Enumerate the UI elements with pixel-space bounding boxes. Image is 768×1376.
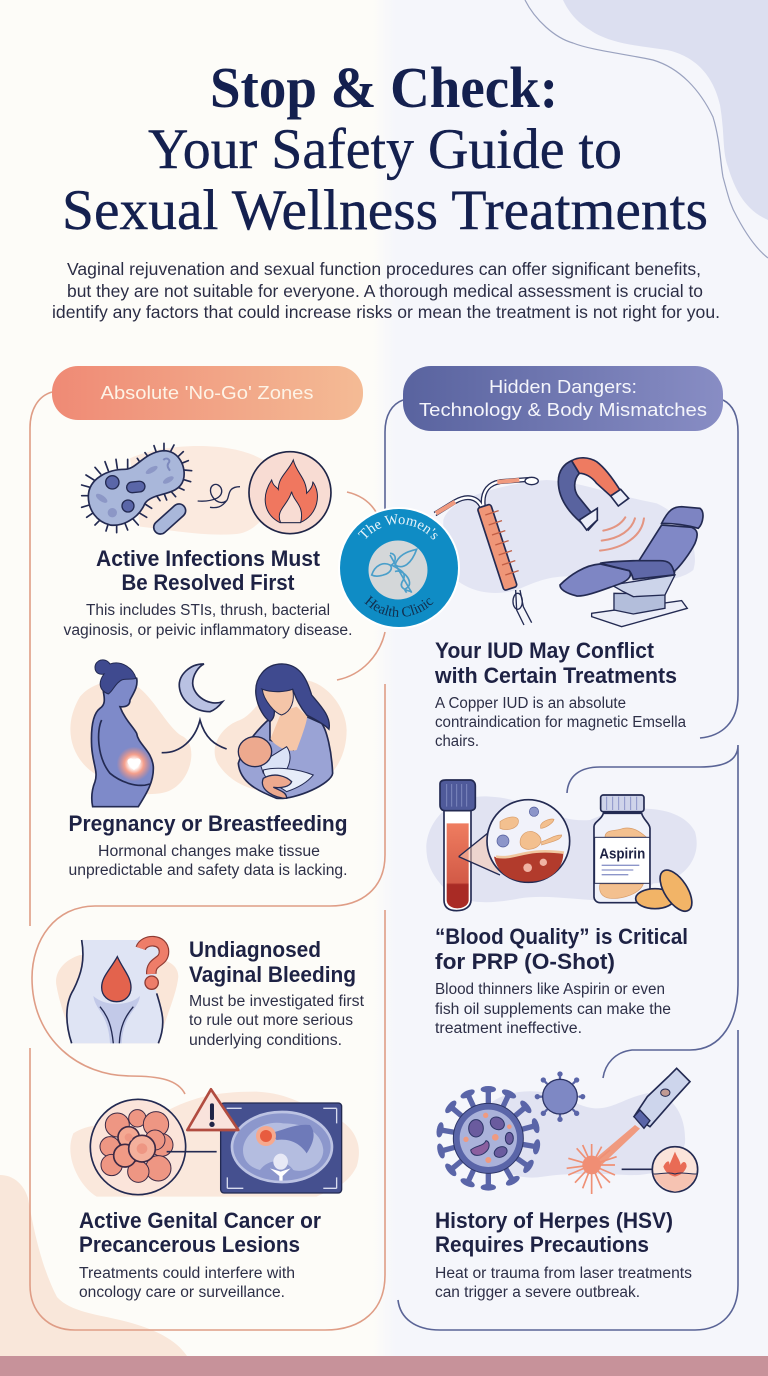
heading pill: absolute no-go zones — [52, 366, 363, 420]
text: blood quality — [435, 981, 671, 1037]
icon: blood tube, magnifier and aspirin — [426, 780, 698, 916]
icon: cancer cells and scan — [70, 1089, 359, 1197]
heading: genital cancer: Precancerous Lesions — [79, 1232, 300, 1257]
icon: bacteria and flame — [82, 443, 331, 537]
heading: pregnancy: Pregnancy or Breastfeeding — [68, 811, 348, 836]
title — [62, 55, 708, 242]
heading: IUD — [434, 638, 677, 688]
heading: active infections — [96, 546, 321, 595]
text: pregnancy: Hormonal changes make tissue — [98, 843, 320, 860]
icon: IUD, magnet and chair — [435, 458, 703, 627]
text: genital cancer: oncology care or surveillance. — [79, 1284, 285, 1301]
text: undiagnosed bleeding: Must be investigated first — [189, 993, 365, 1010]
text: genital cancer — [79, 1265, 295, 1301]
heading pill: absolute no-go zones: Absolute 'No-Go' Zones — [100, 382, 314, 403]
heading: undiagnosed bleeding: Vaginal Bleeding — [189, 962, 356, 987]
heading: undiagnosed bleeding: Undiagnosed — [189, 937, 321, 962]
text: undiagnosed bleeding: to rule out more serious — [189, 1012, 353, 1029]
text: active infections: vaginosis, or peivic inflammatory disease. — [64, 622, 352, 639]
heading pill: hidden dangers — [403, 366, 723, 431]
logo: The Women's Health Clinic — [340, 507, 460, 629]
logo: The Women's Health Clinic: Health Clinic — [364, 596, 434, 617]
heading: active infections: Active Infections Must — [96, 546, 321, 571]
text: herpes — [435, 1265, 692, 1301]
text: IUD: contraindication for magnetic Emsella — [435, 714, 686, 731]
heading: blood quality: for PRP (O-Shot) — [435, 949, 615, 974]
heading: blood quality: “Blood Quality” is Critical — [435, 924, 688, 949]
title: Sexual Wellness Treatments — [62, 179, 708, 242]
logo: The Women's Health Clinic: The Women's — [358, 514, 438, 540]
intro text — [52, 259, 720, 322]
icon: virus and laser — [437, 1068, 698, 1194]
title: Your Safety Guide to — [148, 118, 622, 181]
heading: genital cancer — [79, 1208, 321, 1257]
heading: genital cancer: Active Genital Cancer or — [79, 1208, 321, 1233]
heading: herpes: History of Herpes (HSV) — [435, 1208, 673, 1233]
heading: IUD: with Certain Treatments — [434, 663, 677, 688]
heading: undiagnosed bleeding — [189, 937, 356, 987]
intro text: identify any factors that could increase risks or mean the treatment is not right for you. — [52, 302, 720, 322]
heading: active infections: Be Resolved First — [122, 570, 295, 595]
panel outline: left — [30, 392, 385, 1330]
text: genital cancer: Treatments could interfere with — [79, 1265, 295, 1282]
text: blood quality: Blood thinners like Aspirin or even — [435, 981, 665, 998]
heading pill: hidden dangers: Technology & Body Mismatches — [419, 399, 707, 420]
text: blood quality: treatment ineffective. — [435, 1020, 582, 1037]
decorative bottom left blob — [0, 1175, 187, 1356]
text: IUD: A Copper IUD is an absolute — [435, 695, 626, 712]
text: herpes: Heat or trauma from laser treatments — [435, 1265, 692, 1282]
title: Stop & Check: — [210, 55, 558, 120]
icon: pregnancy and breastfeeding — [70, 660, 347, 807]
icon: bleeding question — [56, 940, 178, 1043]
text: undiagnosed bleeding: underlying conditions. — [189, 1032, 342, 1049]
text: active infections — [64, 602, 352, 639]
heading: IUD: Your IUD May Conflict — [435, 638, 655, 663]
text: IUD: chairs. — [435, 733, 479, 750]
text: undiagnosed bleeding — [189, 993, 365, 1049]
text: blood quality: fish oil supplements can make the — [435, 1001, 671, 1018]
bottom band — [0, 1356, 768, 1376]
intro text: Vaginal rejuvenation and sexual function procedures can offer significant benefits, — [67, 259, 701, 279]
text: active infections: This includes STIs, thrush, bacterial — [86, 602, 330, 619]
heading: blood quality — [435, 924, 688, 974]
panel outline: right — [385, 400, 738, 1330]
text: pregnancy: unpredictable and safety data is lacking. — [68, 862, 348, 879]
intro text: but they are not suitable for everyone. A thorough medical assessment is crucial to — [67, 281, 703, 301]
decorative top right blob — [563, 0, 768, 220]
heading: herpes — [435, 1208, 673, 1257]
icon: blood tube, magnifier and aspirin: Aspirin — [599, 847, 645, 863]
text: herpes: can trigger a severe outbreak. — [435, 1284, 640, 1301]
heading pill: hidden dangers: Hidden Dangers: — [489, 376, 637, 397]
text: IUD — [435, 695, 686, 750]
text: pregnancy — [68, 843, 348, 879]
heading: herpes: Requires Precautions — [435, 1232, 649, 1257]
